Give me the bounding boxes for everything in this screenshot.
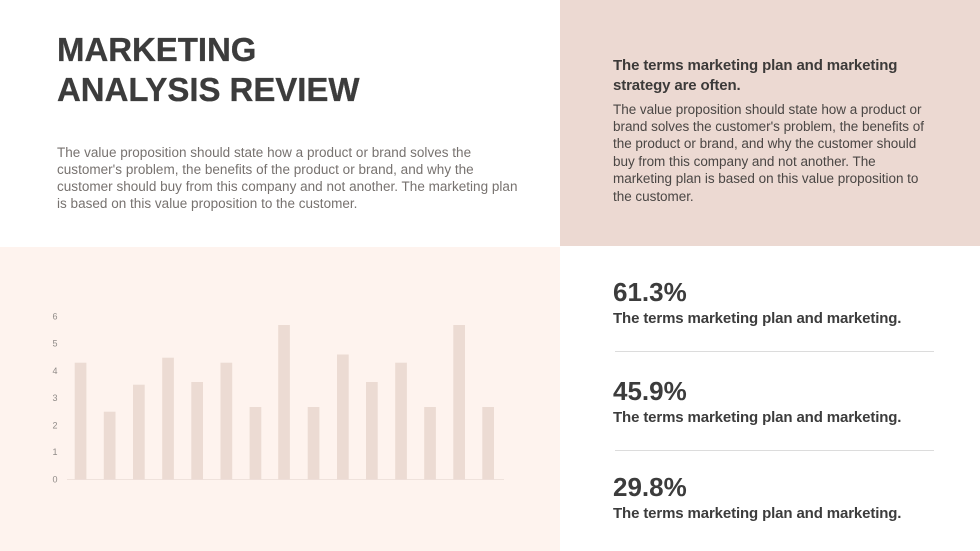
bar chart: 6 — [52, 312, 58, 322]
text block: right paragraph: the product or brand, and why the customer should — [613, 136, 916, 151]
bar chart — [52, 312, 504, 484]
divider — [615, 450, 934, 451]
text block: right paragraph — [613, 102, 924, 204]
bar chart: 0 — [52, 474, 58, 484]
heading: terms: strategy are often. — [613, 77, 741, 94]
title — [57, 31, 360, 108]
stat: 45.9% — [613, 376, 901, 426]
bar chart: 4 — [52, 366, 58, 376]
heading: terms: The terms marketing plan and marketing — [613, 56, 897, 74]
panel: top right background — [560, 0, 980, 246]
text block: right paragraph: marketing plan is based on this value proposition to — [613, 171, 918, 186]
stat: 61.3% — [613, 277, 901, 326]
stat: 45.9%: The terms marketing plan and marketing. — [613, 408, 901, 426]
text block: right paragraph: buy from this company and not another. The — [613, 154, 876, 169]
title: MARKETING — [57, 31, 256, 68]
bar chart: 2 — [52, 420, 58, 430]
stat: 29.8%: 29.8% — [613, 472, 687, 502]
text block: intro paragraph: customer should buy from this company and not another. The marketing plan — [57, 179, 517, 194]
bar chart: 3 — [52, 393, 58, 403]
heading: terms — [613, 56, 897, 94]
text block: right paragraph: the customer. — [613, 188, 694, 204]
text block: intro paragraph: is based on this value proposition to the customer. — [57, 196, 357, 211]
stat: 29.8% — [613, 472, 901, 522]
stat: 29.8%: The terms marketing plan and marketing. — [613, 504, 901, 522]
stat: 45.9%: 45.9% — [613, 376, 687, 406]
stat: 61.3%: 61.3% — [613, 277, 687, 307]
stat: 61.3%: The terms marketing plan and marketing. — [613, 310, 901, 326]
bar chart: 5 — [52, 338, 58, 348]
bar chart: 1 — [52, 447, 58, 457]
panel: chart background — [0, 247, 560, 551]
text block: right paragraph: brand solves the customer's problem, the benefits of — [613, 119, 924, 134]
divider — [615, 351, 934, 352]
text block: intro paragraph: customer's problem, the benefits of the product or brand, and why the — [57, 162, 474, 177]
text block: intro paragraph: The value proposition should state how a product or brand solves the — [57, 144, 471, 160]
text block: intro paragraph — [57, 144, 517, 211]
title: ANALYSIS REVIEW — [57, 71, 359, 108]
text block: right paragraph: The value proposition should state how a product or — [613, 102, 921, 116]
